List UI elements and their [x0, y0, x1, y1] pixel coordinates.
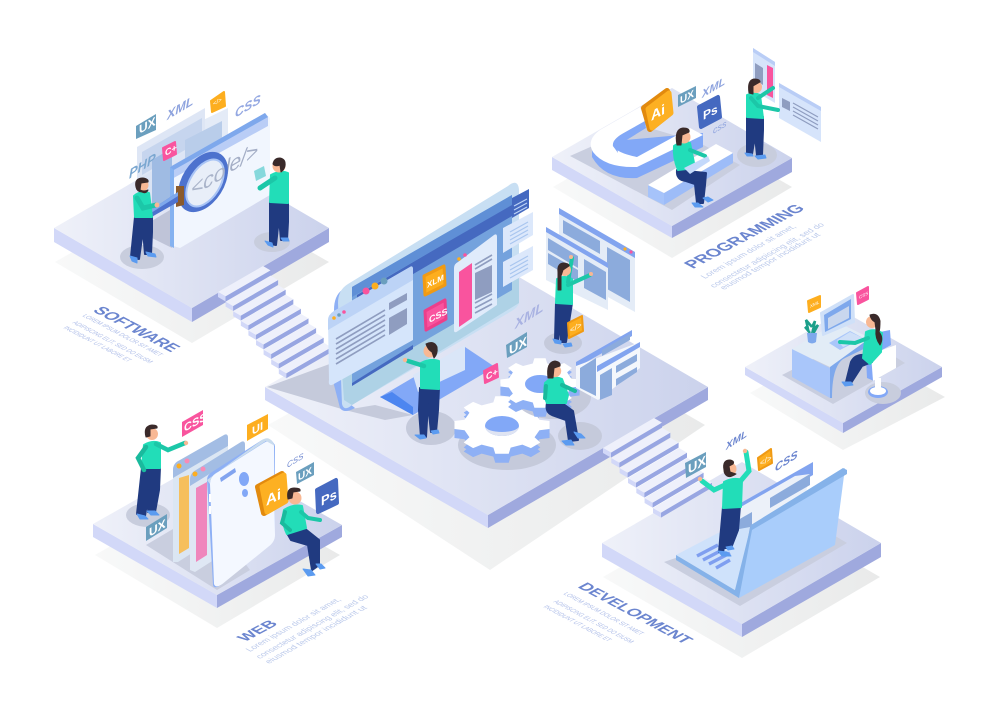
dots on screen — [362, 278, 388, 294]
title block: development: ADIPISCING ELIT, SED DO EIUSM — [551, 600, 635, 644]
label: XML: XML — [514, 300, 543, 333]
code window: <code/> — [186, 137, 258, 203]
window behind laptop — [732, 462, 813, 590]
tag: C+: C+ — [165, 142, 177, 159]
tag: code: </> — [570, 320, 582, 335]
label: XML: XML — [725, 428, 747, 453]
platform: web — [93, 454, 342, 608]
title block: programming: Lorem ipsum dolor sit amet, — [698, 223, 798, 280]
tag: UX small: UX — [298, 465, 313, 484]
tag: UX small — [296, 462, 314, 484]
tag: UI — [247, 414, 268, 441]
label: XML: XML — [701, 74, 725, 101]
title block: web: Lorem ipsum dolor sit amet, — [243, 596, 343, 653]
gear large — [454, 396, 556, 470]
tag: code — [211, 92, 225, 112]
monitor — [334, 183, 519, 411]
platform: central — [265, 259, 708, 528]
platform: software — [54, 148, 329, 322]
label: css: css — [713, 118, 727, 137]
label: PHP: PHP — [129, 150, 156, 183]
title block: programming: eiusmod tempor incididunt ut — [717, 231, 823, 291]
person: man at monitor — [403, 343, 456, 445]
magnifying glass — [143, 143, 238, 221]
tag: UX: UX — [509, 333, 528, 358]
desk — [792, 322, 872, 398]
scene: software — [120, 92, 290, 269]
floor shade — [570, 125, 740, 210]
back windows — [546, 208, 635, 312]
title block: web: consectetur adipiscing elit, sed do — [253, 593, 371, 660]
floor shade — [146, 510, 250, 590]
title block: software: LOREM IPSUM DOLOR SIT AMET — [80, 314, 164, 358]
person: woman at desk — [840, 314, 882, 386]
tag: UX lower: UX — [149, 516, 166, 540]
scene: workstation — [782, 287, 905, 404]
icon: Ai: Ai — [266, 486, 281, 510]
title block: programming — [680, 202, 827, 291]
person: man arms raised — [698, 449, 749, 556]
plant — [805, 320, 818, 344]
title block: programming: consectetur adipiscing elit, sed do — [707, 221, 827, 289]
U magnet shape — [591, 107, 703, 178]
person: man with tablet — [254, 158, 290, 252]
app window front — [190, 441, 245, 572]
label: CSS: CSS — [775, 447, 798, 475]
title block: software — [61, 304, 184, 364]
ground shadows beneath platforms — [55, 118, 945, 658]
tag: XLM — [424, 266, 445, 295]
window: main — [328, 266, 413, 386]
tag: UX: UX — [680, 88, 695, 107]
tag: CSS: CSS — [429, 306, 447, 326]
window: pink bar — [454, 234, 497, 332]
person: woman standing at windows — [544, 255, 593, 354]
icon: Ai — [644, 91, 671, 129]
person shadow seated — [558, 422, 602, 450]
person: woman seated on gear — [544, 361, 585, 445]
scene: central computer — [267, 183, 640, 470]
side tab and mini windows — [503, 189, 533, 287]
tag: UX: UX — [688, 452, 707, 477]
laptop — [676, 468, 847, 598]
code window — [170, 113, 270, 248]
tag: UX: UX — [139, 113, 156, 137]
tag: CSS — [425, 300, 447, 330]
title block: software: SOFTWARE — [88, 304, 184, 354]
stairs: software to central — [218, 266, 331, 378]
title block: development: INCIDIDUNT UT LABORE ET — [541, 605, 613, 643]
tag: CSS pink: CSS — [184, 409, 207, 435]
chair — [865, 330, 901, 404]
platform: workstation — [745, 311, 942, 433]
person: woman seated with laptop — [674, 128, 713, 207]
tag: UX — [678, 86, 696, 107]
platform: development — [602, 462, 881, 637]
gear small — [500, 358, 591, 419]
tag: orange: XML — [810, 299, 820, 310]
icon: Ps: Ps — [321, 487, 337, 509]
person: man pointing — [126, 425, 188, 527]
label: CSS: CSS — [235, 92, 261, 121]
stairs: central to development — [603, 418, 712, 518]
title block: web: WEB — [234, 618, 282, 644]
title block: development: DEVELOPMENT — [573, 581, 696, 646]
floor shade — [267, 362, 413, 420]
window with pink bar — [753, 48, 775, 103]
tag: code: </> — [213, 96, 222, 108]
label: XML: XML — [166, 93, 193, 123]
icon: Ai: Ai — [651, 101, 665, 125]
tag: code — [758, 449, 772, 470]
icon: Ps — [699, 97, 720, 127]
icon: Ps — [317, 480, 337, 512]
floor shadow — [150, 210, 172, 248]
tag: UX lower — [146, 514, 167, 541]
monitor — [821, 295, 863, 350]
floor shade — [664, 515, 847, 606]
text window — [779, 83, 821, 142]
tag: C+: C+ — [486, 366, 498, 383]
tag: code — [568, 316, 583, 338]
phone — [207, 438, 275, 587]
floor shade — [782, 335, 905, 404]
icon: Ai — [258, 474, 286, 513]
title block: programming: PROGRAMMING — [680, 202, 809, 271]
platform: programming — [552, 88, 792, 238]
icon: Ps: Ps — [703, 101, 718, 123]
magnifying glass: <co — [191, 158, 225, 202]
scene: development — [664, 428, 847, 606]
label: css: CSS — [287, 451, 304, 470]
bench — [648, 144, 733, 205]
scene: programming — [570, 48, 821, 210]
person: woman standing — [737, 79, 778, 167]
scene: web — [126, 409, 337, 590]
back code panels — [137, 108, 228, 217]
person: man seated — [282, 488, 325, 576]
title block: web: eiusmod tempor incididunt ut — [262, 604, 370, 665]
tag: XLM: XLM — [427, 272, 444, 290]
tag: UI: UI — [252, 419, 263, 438]
monitor stand — [380, 345, 495, 415]
tag: pink: CSS — [859, 291, 868, 301]
title block: software: ADIPISCING ELIT, SED DO EIUSM — [70, 321, 154, 364]
floating windows — [576, 330, 640, 400]
title block: software: INCIDIDUNT UT LABORE ET — [61, 326, 133, 363]
person: man with magnifier — [120, 178, 164, 269]
tag: code: </> — [760, 453, 772, 468]
app window back — [173, 434, 228, 562]
title block: development: LOREM IPSUM DOLOR SIT AMET — [561, 592, 645, 637]
